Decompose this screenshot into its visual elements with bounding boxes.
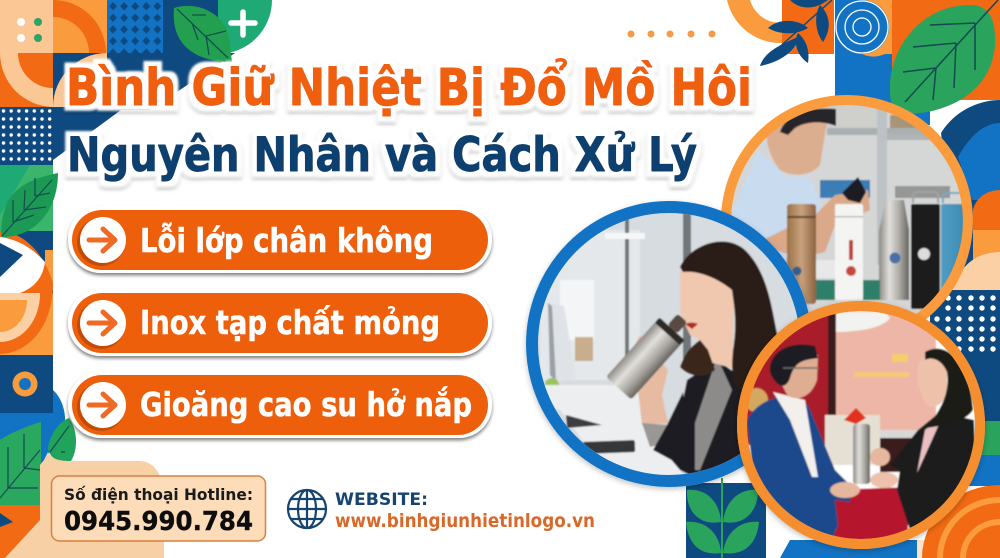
website url: www.binhgiunhietinlogo.vn bbox=[335, 510, 595, 532]
icon: sprout block bbox=[686, 478, 766, 558]
button: rubber gasket gap: Gioăng cao su hở nắp bbox=[140, 385, 472, 424]
man bbox=[747, 397, 852, 545]
dots bbox=[934, 295, 996, 352]
decoration: right column bbox=[930, 100, 1000, 486]
decoration: left dotted block bbox=[0, 107, 125, 165]
table bbox=[832, 486, 910, 539]
decoration: top right shapes bbox=[727, 0, 1000, 125]
bottles bbox=[787, 204, 816, 304]
button: thin impure inox: Inox tạp chất mỏng bbox=[140, 303, 440, 342]
icon: left small leaf bbox=[1, 173, 58, 237]
button: rubber gasket gap bbox=[68, 371, 492, 438]
bottle bbox=[853, 424, 870, 484]
hands bbox=[830, 482, 860, 498]
icon: big green leaf bbox=[890, 0, 998, 114]
icon: plus bbox=[231, 12, 255, 35]
button: vacuum layer fault: Lỗi lớp chân không bbox=[140, 221, 433, 260]
woman bbox=[890, 412, 976, 530]
icon: navy branch bbox=[760, 0, 832, 66]
title line 2: Nguyên Nhân và Cách Xử Lý bbox=[67, 128, 697, 183]
icon: arrow bbox=[89, 394, 115, 416]
hotline number: 0945.990.784 bbox=[64, 507, 253, 537]
decoration: orange dots bbox=[628, 30, 716, 38]
decoration: top left geometric blocks bbox=[0, 0, 272, 110]
decoration: bottom left leaves and peach block bbox=[0, 418, 164, 558]
photo: handover ceremony bbox=[737, 301, 985, 549]
hotline box bbox=[52, 476, 266, 541]
title line 1: Bình Giữ Nhiệt Bị Đổ Mồ Hôi bbox=[66, 57, 752, 118]
icon: top leaf bbox=[174, 6, 232, 62]
website block bbox=[335, 490, 595, 532]
icon: arrow bbox=[89, 229, 115, 251]
button: thin impure inox bbox=[68, 289, 492, 356]
photo: woman drinking from bottle bbox=[526, 201, 812, 490]
hotline label: Số điện thoại Hotline: bbox=[64, 485, 253, 504]
decoration: bottom right arcs bbox=[780, 485, 1000, 558]
icon: arrow bbox=[89, 312, 115, 334]
man bbox=[732, 150, 820, 259]
decoration: left column bbox=[0, 165, 65, 470]
woman bbox=[671, 362, 742, 474]
button: vacuum layer fault bbox=[68, 206, 492, 273]
website label: WEBSITE: bbox=[335, 490, 428, 510]
bottle bbox=[606, 314, 687, 400]
icon: globe bbox=[288, 490, 326, 528]
title bbox=[66, 57, 752, 183]
photo: man inspecting bottles bbox=[721, 95, 973, 320]
